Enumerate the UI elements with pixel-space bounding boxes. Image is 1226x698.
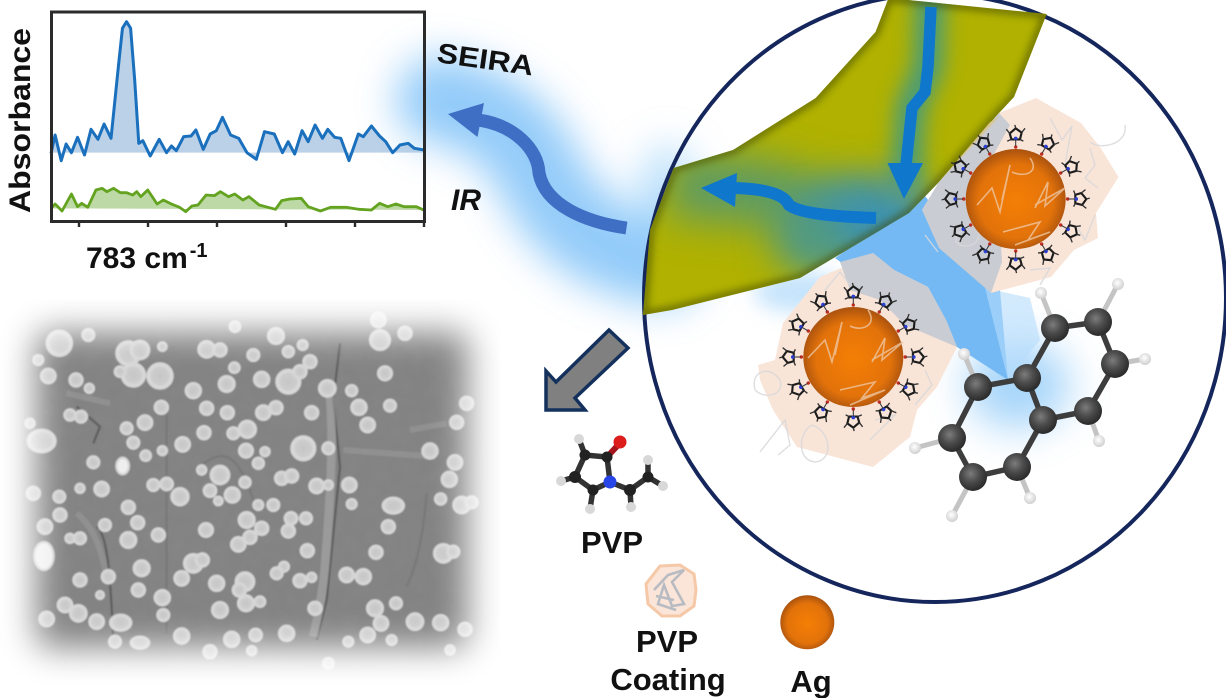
carbon atoms [938, 308, 1129, 491]
SEIRA label: SEIRA [435, 37, 536, 81]
lower PVP-coated Ag nanoparticle [754, 253, 957, 467]
blue hot-spot glow [754, 272, 1070, 429]
IR label: IR [451, 184, 481, 217]
PVP Coating label: PVP [636, 624, 698, 659]
PVP label: PVP [581, 525, 643, 560]
blue arrow: light travelling down the waveguide [888, 7, 931, 199]
PVP Coating label: Coating [610, 662, 726, 697]
hot-spot beam between particles [835, 196, 1040, 380]
grey arrow to SEM image [546, 330, 628, 410]
Ag label: Ag [790, 664, 832, 698]
coating overlap with hot-spot [922, 113, 1010, 293]
hydrogen atoms [909, 278, 1151, 522]
spectrum traces [51, 22, 424, 212]
absorbance spectrum chart [51, 12, 425, 227]
blue glow behind IR arrow [440, 100, 698, 262]
silver waveguide band [643, 0, 1047, 315]
SEM micrograph [12, 308, 492, 672]
blue arrow: scattered signal along the waveguide [701, 173, 876, 218]
blurred surface detail wrapper [25, 313, 478, 669]
PVP ligand shell [942, 125, 1090, 273]
y axis label: Absorbance [4, 28, 37, 213]
magnified circle outline [644, 0, 1226, 602]
Ag legend icon [780, 595, 834, 649]
C–C bonds [952, 322, 1115, 477]
arrow: IR signal to spectrum [448, 103, 626, 228]
PVP coating [922, 98, 1118, 293]
PVP coating legend icon [646, 565, 696, 616]
coating overlap with hot-spot [840, 253, 957, 347]
Ag core [966, 149, 1066, 249]
silver nanoparticles [25, 313, 478, 669]
PVP molecule icon [556, 434, 668, 514]
aromatic molecule (ball-and-stick) [909, 278, 1151, 522]
substrate cracks and ridges [67, 343, 447, 640]
PVP coating [758, 253, 957, 467]
C–H bonds [915, 284, 1145, 516]
Ag core [803, 307, 903, 407]
PVP ligand shell [779, 283, 927, 431]
x axis label: 783 cm [86, 242, 188, 275]
upper PVP-coated Ag nanoparticle [922, 98, 1125, 293]
x axis label: -1 [190, 240, 208, 262]
